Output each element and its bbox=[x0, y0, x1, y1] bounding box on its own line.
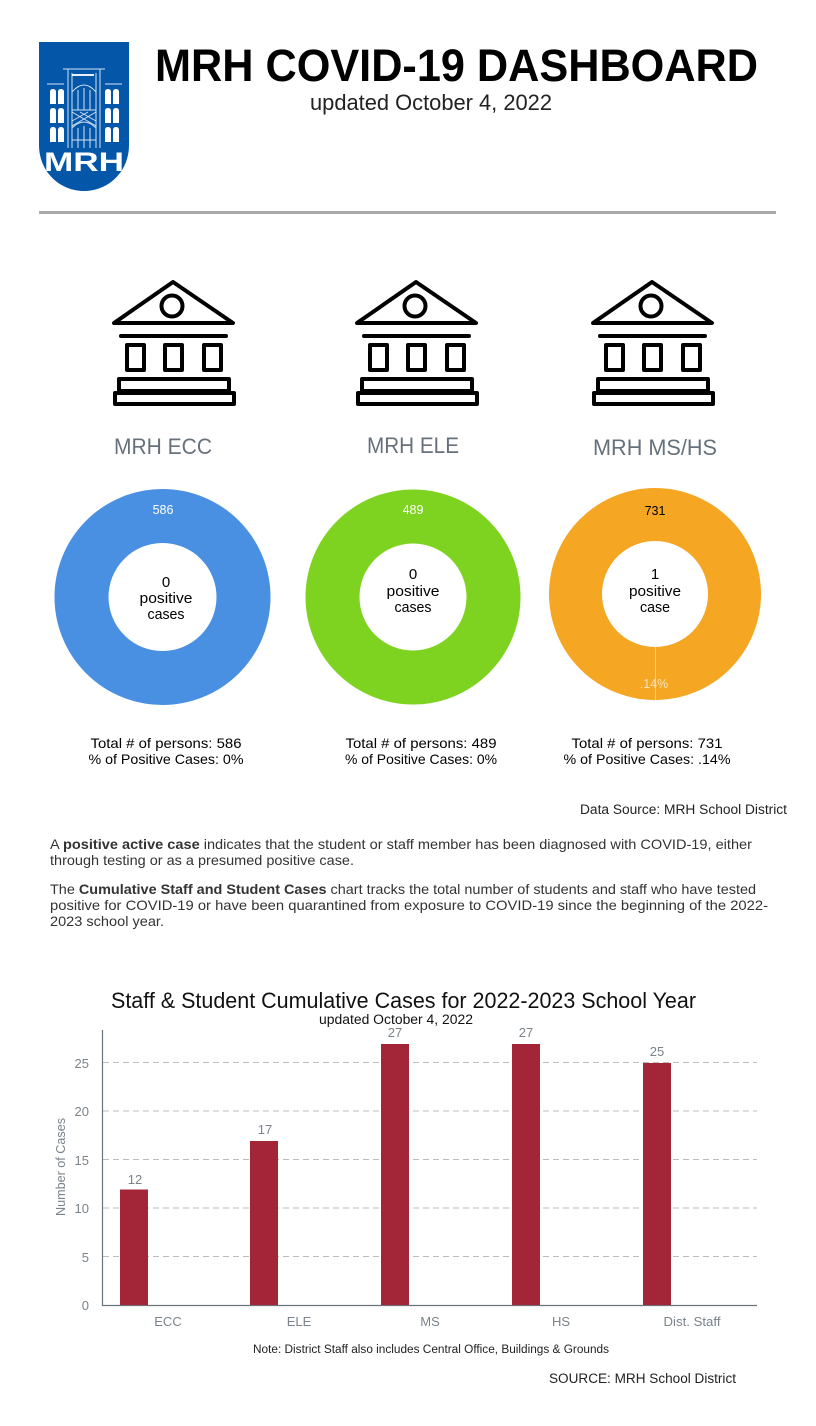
x axis labels: HS bbox=[552, 1314, 570, 1329]
chart title: Staff & Student Cumulative Cases for 2022-2023 School Year bbox=[111, 988, 696, 1013]
donut chart: ELE: cases bbox=[394, 599, 432, 616]
bar values: 27 bbox=[388, 1025, 402, 1040]
stats: ELE: % of Positive Cases: 0% bbox=[345, 751, 497, 767]
bar values: 17 bbox=[258, 1122, 272, 1137]
donut chart: MS/HS: case bbox=[640, 599, 670, 616]
bar values bbox=[128, 1025, 664, 1187]
donut chart: MS/HS: 1 bbox=[651, 566, 659, 583]
data source note: Data Source: MRH School District bbox=[580, 802, 787, 817]
donut chart: ELE: positive bbox=[386, 583, 440, 600]
x axis labels: Dist. Staff bbox=[664, 1314, 721, 1329]
x axis labels: ECC bbox=[154, 1314, 182, 1329]
stats: ECC: Total # of persons: 586 bbox=[90, 735, 242, 751]
bars bbox=[120, 1044, 671, 1305]
y axis labels: 5 bbox=[82, 1250, 89, 1265]
donut chart: ECC: cases bbox=[148, 606, 184, 623]
y axis labels: 25 bbox=[75, 1056, 89, 1071]
text block: cumulative chart explanation: 2023 school year. bbox=[50, 913, 164, 929]
stats: ELE: Total # of persons: 489 bbox=[346, 735, 497, 751]
stats: ELE bbox=[345, 735, 497, 767]
panel: MRH MS/HS bbox=[564, 282, 734, 767]
stats: ECC bbox=[88, 735, 244, 767]
x axis labels: MS bbox=[420, 1314, 440, 1329]
logo: MRH shield bbox=[39, 42, 129, 191]
icon: MS/HS school building bbox=[593, 282, 713, 404]
donut chart: ECC bbox=[82, 503, 244, 678]
donut chart: ECC: 0 bbox=[162, 574, 170, 591]
donut chart: ELE: 0 bbox=[409, 566, 417, 583]
bar values: 25 bbox=[650, 1044, 664, 1059]
donut chart: ECC: 586 bbox=[153, 503, 173, 517]
donut chart: MS/HS: positive bbox=[629, 583, 681, 600]
bar values: 27 bbox=[519, 1025, 533, 1040]
panel: MRH ELE bbox=[332, 282, 497, 767]
x axis labels: ELE bbox=[287, 1314, 312, 1329]
y axis labels: 15 bbox=[75, 1153, 89, 1168]
label: MRH ECC: MRH ECC bbox=[114, 434, 212, 459]
donut chart: MS/HS: .14% bbox=[640, 677, 668, 691]
text block: cumulative chart explanation bbox=[50, 881, 768, 929]
y axis labels: 10 bbox=[75, 1201, 89, 1216]
y axis labels: 0 bbox=[82, 1298, 89, 1313]
donut chart: MS/HS bbox=[576, 504, 734, 700]
source: SOURCE: MRH School District bbox=[549, 1371, 736, 1386]
label: MRH ELE: MRH ELE bbox=[367, 433, 459, 458]
donut chart: MS/HS: 731 bbox=[645, 504, 665, 518]
text block: positive active case definition: A positive active case indicates that the student or staff member has been diagnosed with COVID-19, either bbox=[50, 836, 752, 852]
chart subtitle: updated October 4, 2022 bbox=[319, 1012, 473, 1027]
chart note: Note: District Staff also includes Central Office, Buildings & Grounds bbox=[253, 1344, 609, 1356]
donut chart: ECC: positive bbox=[140, 590, 192, 607]
y axis labels: 20 bbox=[75, 1104, 89, 1119]
text block: cumulative chart explanation: The Cumulative Staff and Student Cases chart tracks the total number of students and staff who have tested bbox=[50, 881, 756, 897]
stats: MS/HS: % of Positive Cases: .14% bbox=[564, 751, 730, 767]
x axis labels bbox=[154, 1314, 721, 1329]
subtitle: update date: updated October 4, 2022 bbox=[310, 90, 552, 115]
stats: ECC: % of Positive Cases: 0% bbox=[88, 751, 244, 767]
bar values: 12 bbox=[128, 1172, 142, 1187]
header divider bbox=[39, 211, 776, 214]
stats: MS/HS: Total # of persons: 731 bbox=[572, 735, 723, 751]
logo: MRH shield: MRH bbox=[44, 147, 124, 177]
stats: MS/HS bbox=[564, 735, 730, 767]
text block: cumulative chart explanation: positive for COVID-19 or have been quarantined from exposure to COVID-19 since the beginning of the 2022- bbox=[50, 897, 768, 913]
donut chart: ELE bbox=[332, 503, 494, 678]
bar chart: cumulative cases bbox=[54, 1025, 757, 1329]
text block: positive active case definition bbox=[50, 836, 752, 868]
donut chart: ELE: 489 bbox=[403, 503, 423, 517]
icon: ELE school building bbox=[357, 282, 477, 404]
text block: positive active case definition: through testing or as a presumed positive case. bbox=[50, 852, 354, 868]
label: MRH MS/HS: MRH MS/HS bbox=[593, 435, 717, 460]
y axis labels bbox=[75, 1056, 89, 1313]
title: MRH COVID-19 DASHBOARD bbox=[155, 40, 758, 91]
icon: ECC school building bbox=[114, 282, 234, 404]
y axis title: Number of Cases bbox=[54, 1118, 68, 1216]
panel: MRH ECC bbox=[82, 282, 244, 767]
